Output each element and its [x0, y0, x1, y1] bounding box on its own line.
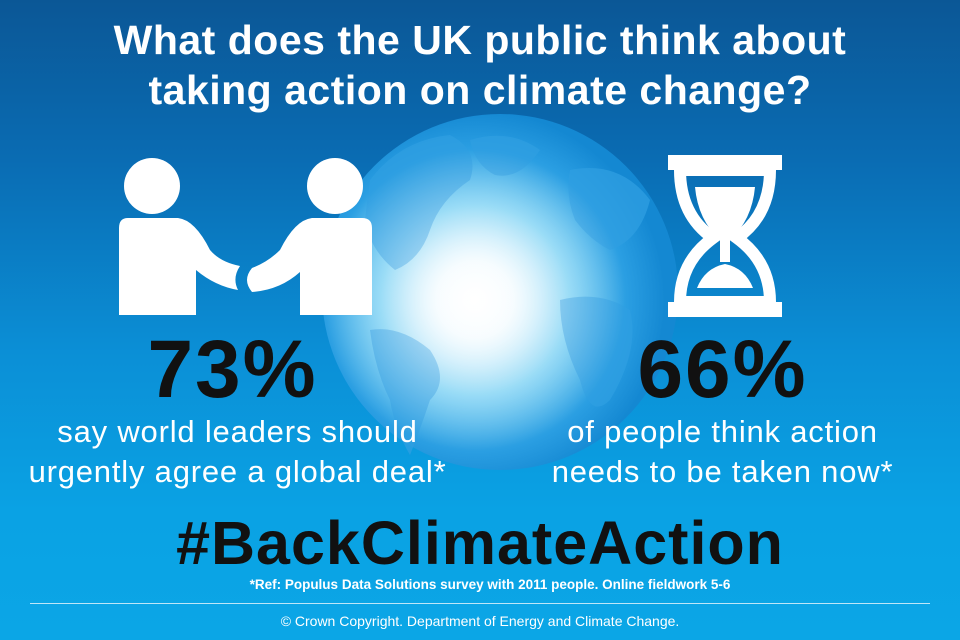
- title: taking action on climate change?: [148, 67, 812, 113]
- text: 66% caption: of people think action: [567, 414, 878, 449]
- text: 66% caption: needs to be taken now*: [552, 454, 893, 489]
- footnote: *Ref: Populus Data Solutions survey with 2011 people. Online fieldwork 5-6: [250, 577, 730, 592]
- stat: 73%: 73%: [147, 324, 318, 415]
- text: 66% caption: [552, 414, 893, 489]
- text: 73% caption: [29, 414, 446, 489]
- title: What does the UK public think about: [114, 17, 846, 63]
- stat: 66%: 66%: [637, 324, 808, 415]
- hashtag: #BackClimateAction: [176, 509, 784, 577]
- copyright: © Crown Copyright. Department of Energy and Climate Change.: [281, 613, 679, 629]
- text: 73% caption: urgently agree a global deal*: [29, 454, 446, 489]
- text: 73% caption: say world leaders should: [57, 414, 418, 449]
- title: [114, 17, 846, 113]
- icon: handshake: [119, 158, 372, 315]
- icon: hourglass: [668, 155, 782, 317]
